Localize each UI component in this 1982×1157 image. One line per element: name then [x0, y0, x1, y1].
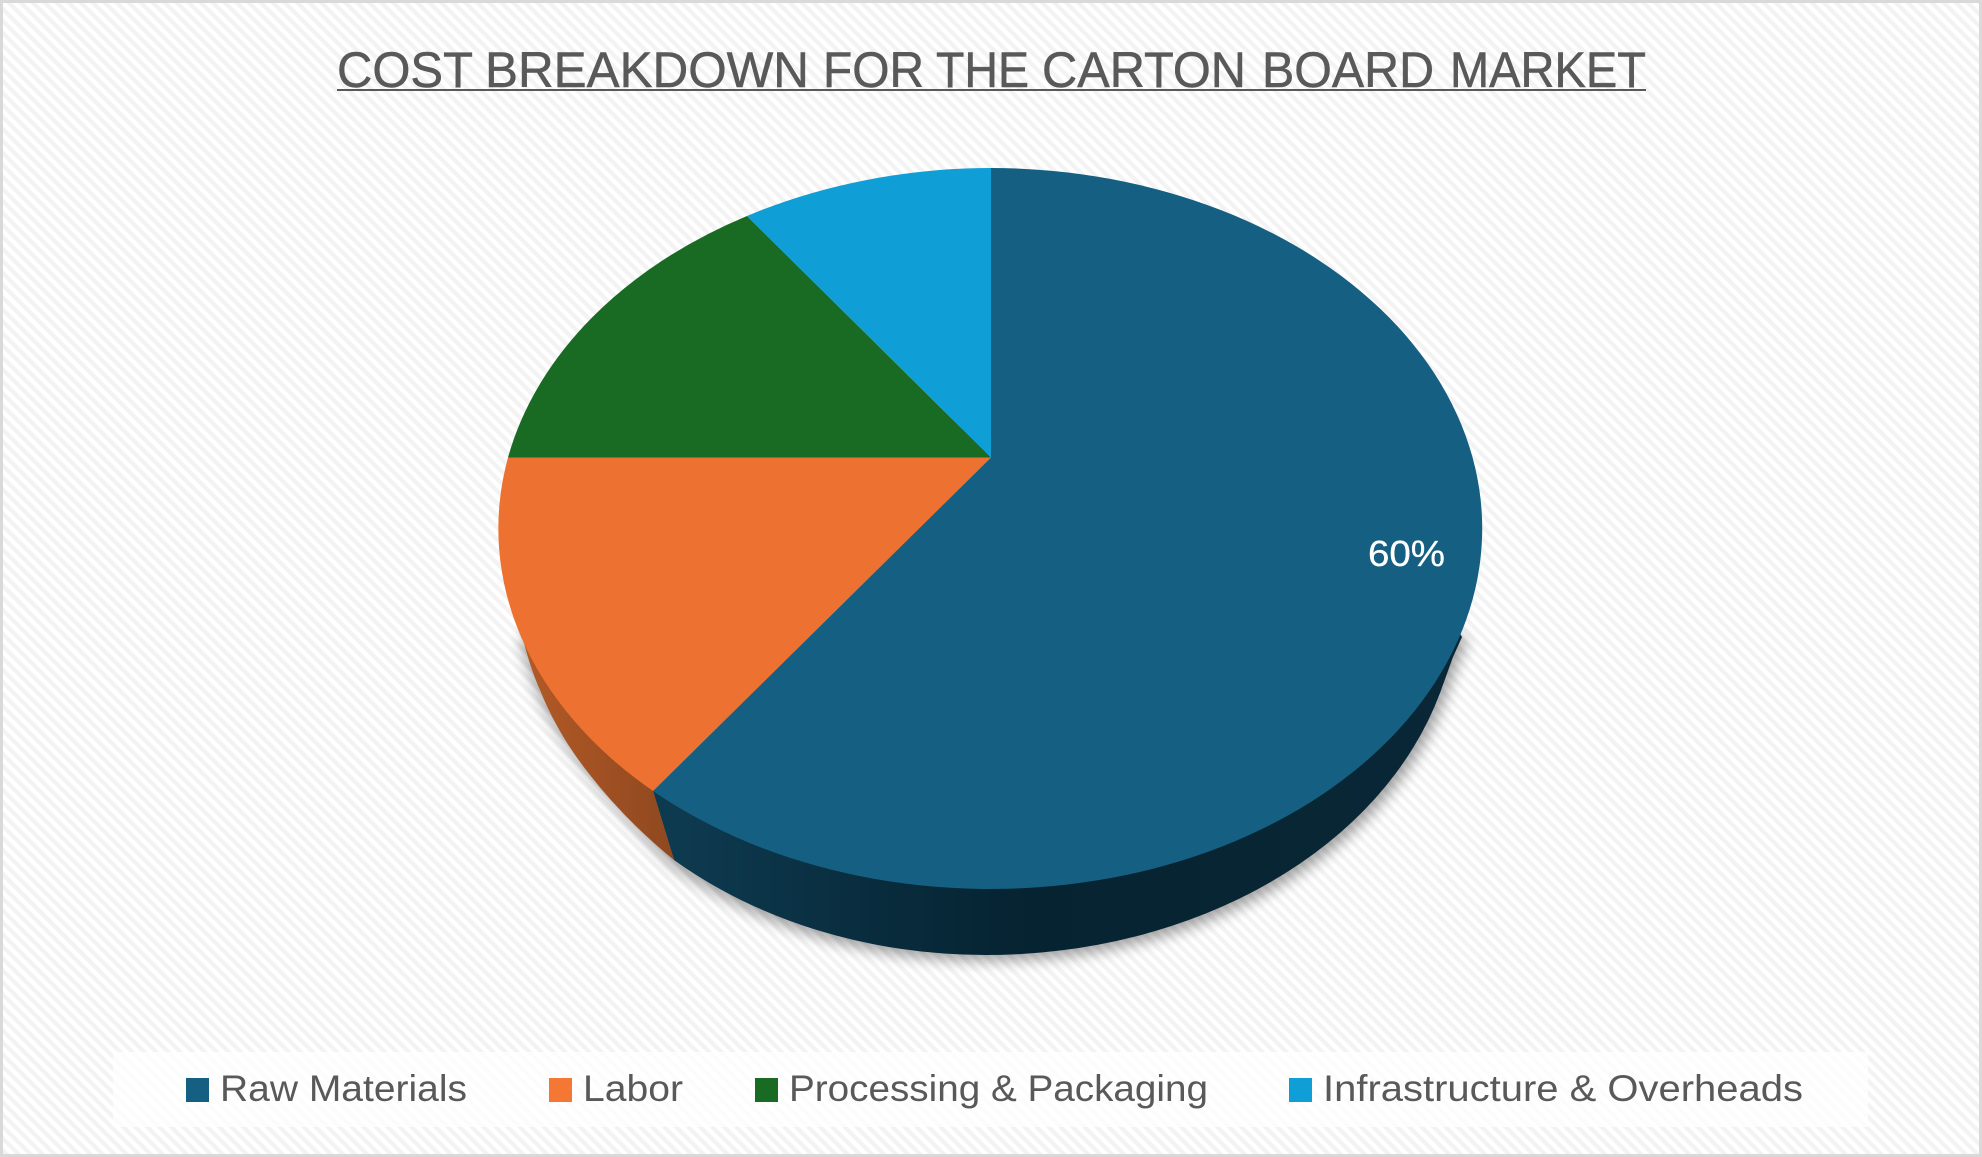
title: MARKET	[1450, 42, 1646, 98]
legend	[113, 1052, 1868, 1127]
slice: raw materials	[653, 168, 1482, 889]
pie side: raw materials	[653, 500, 1462, 955]
title: BREAKDOWN	[485, 42, 809, 98]
slice: labor	[498, 458, 991, 791]
pie chart	[498, 168, 1482, 961]
title	[337, 42, 1646, 98]
title: THE	[936, 42, 1029, 98]
legend item: raw materials: Raw Materials	[220, 1068, 467, 1109]
slice: infrastructure and overheads	[747, 168, 991, 458]
data label: 60%: 60%	[1368, 533, 1445, 574]
title: BOARD	[1262, 42, 1434, 98]
title: CARTON	[1042, 42, 1246, 98]
legend item: labor: Labor	[583, 1068, 683, 1109]
pie drop shadow	[520, 400, 1468, 961]
pie side: labor	[522, 500, 674, 860]
slice: processing and packaging	[508, 216, 991, 458]
title: FOR	[823, 42, 924, 98]
title: COST	[337, 42, 473, 98]
legend item: processing and packaging: Processing & Packaging	[789, 1068, 1208, 1109]
legend item: infrastructure and overheads: Infrastructure & Overheads	[1323, 1068, 1803, 1109]
legend background	[113, 1052, 1868, 1127]
